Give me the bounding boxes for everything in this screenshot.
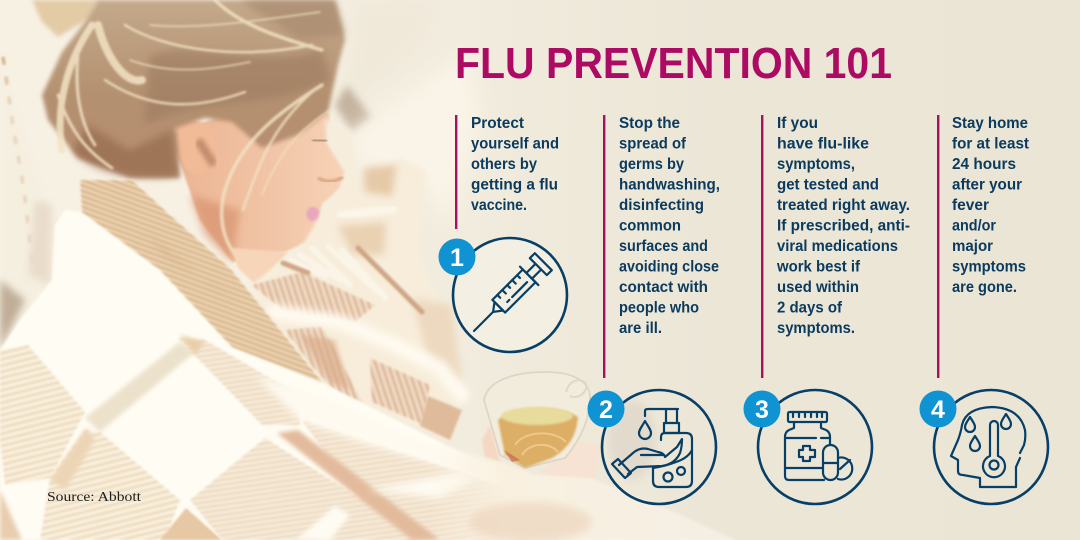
text: step 1: getting a flu [471, 176, 558, 194]
title: FLU PREVENTION 101 [455, 39, 892, 88]
blanket: far shoulder [252, 158, 464, 442]
text: step 4: after your [952, 176, 1022, 194]
text: step 3: If prescribed, anti- [777, 218, 910, 234]
icon: hand and soap [602, 390, 716, 504]
icon: head with thermometer [934, 390, 1048, 504]
step 3 [744, 115, 910, 504]
text: step 4: are gone. [952, 279, 1017, 296]
collar stripe [80, 180, 323, 383]
divider line 2 [603, 115, 605, 378]
text: step 2: Stop the [619, 115, 680, 132]
sofa and pillow [0, 0, 480, 350]
photo: woman wrapped in blanket [0, 0, 735, 540]
glass cup of tea [484, 372, 590, 468]
text: step 2: surfaces and [619, 238, 708, 255]
step 2 [588, 115, 720, 504]
icon: medicine bottle and pills [758, 390, 872, 504]
text: step 3: viral medications [777, 238, 898, 255]
text: step 1: Protect [471, 115, 525, 132]
step 4 [920, 115, 1048, 504]
text: step 3: get tested and [777, 176, 879, 194]
text: step 2: germs by [619, 156, 684, 173]
hand under chin [232, 248, 288, 285]
badge 3 [744, 390, 780, 428]
text: step 4: and/or [952, 218, 996, 234]
text: step 1: others by [471, 156, 537, 173]
text: step 3: have flu-like [777, 136, 869, 152]
badge 1 [438, 238, 476, 276]
plaid bands [0, 345, 85, 485]
divider line 1 [455, 115, 457, 229]
badge 2 [588, 390, 624, 428]
source note: Source: Abbott [47, 489, 141, 504]
icon: syringe [453, 238, 567, 352]
text: step 2: common [619, 218, 681, 234]
divider line 3 [761, 115, 763, 378]
badge 3: 3 [755, 396, 769, 424]
text: step 2: people who [619, 300, 699, 316]
text: step 2: handwashing, [619, 176, 720, 194]
sleeve over cup [430, 438, 735, 540]
neck and face [170, 90, 362, 262]
text: step 3: work best if [776, 258, 861, 276]
text: step 2: disinfecting [619, 197, 704, 214]
badge 1: 1 [450, 244, 464, 272]
text: step 2: avoiding close [619, 258, 719, 276]
hair [42, 0, 345, 258]
hair bun [32, 0, 100, 37]
text: step 3: 2 days of [777, 300, 843, 316]
text: step 2: contact with [619, 279, 708, 296]
text: step 3: symptoms. [777, 320, 855, 337]
text: step 3: treated right away. [777, 197, 910, 214]
step 1 [438, 115, 567, 352]
blanket: main wrap [0, 180, 735, 540]
text: step 4: Stay home [952, 115, 1028, 132]
text: step 3: used within [777, 279, 859, 296]
hand holding cup [482, 425, 600, 482]
text: step 4: symptoms [952, 258, 1026, 276]
text: step 2: are ill. [619, 320, 662, 337]
divider line 4 [937, 115, 939, 378]
text: step 1: vaccine. [471, 197, 527, 214]
text: step 4: for at least [952, 136, 1030, 152]
text: step 3: If you [777, 115, 818, 132]
badge 4: 4 [931, 396, 945, 424]
text: step 2: spread of [619, 136, 687, 152]
badge 2: 2 [599, 396, 613, 424]
text: step 4: major [952, 238, 993, 255]
text: step 3: symptoms, [777, 156, 855, 173]
text: step 4: 24 hours [952, 156, 1016, 173]
text: step 1: yourself and [471, 136, 559, 152]
badge 4 [920, 390, 956, 428]
text: step 4: fever [952, 197, 989, 214]
